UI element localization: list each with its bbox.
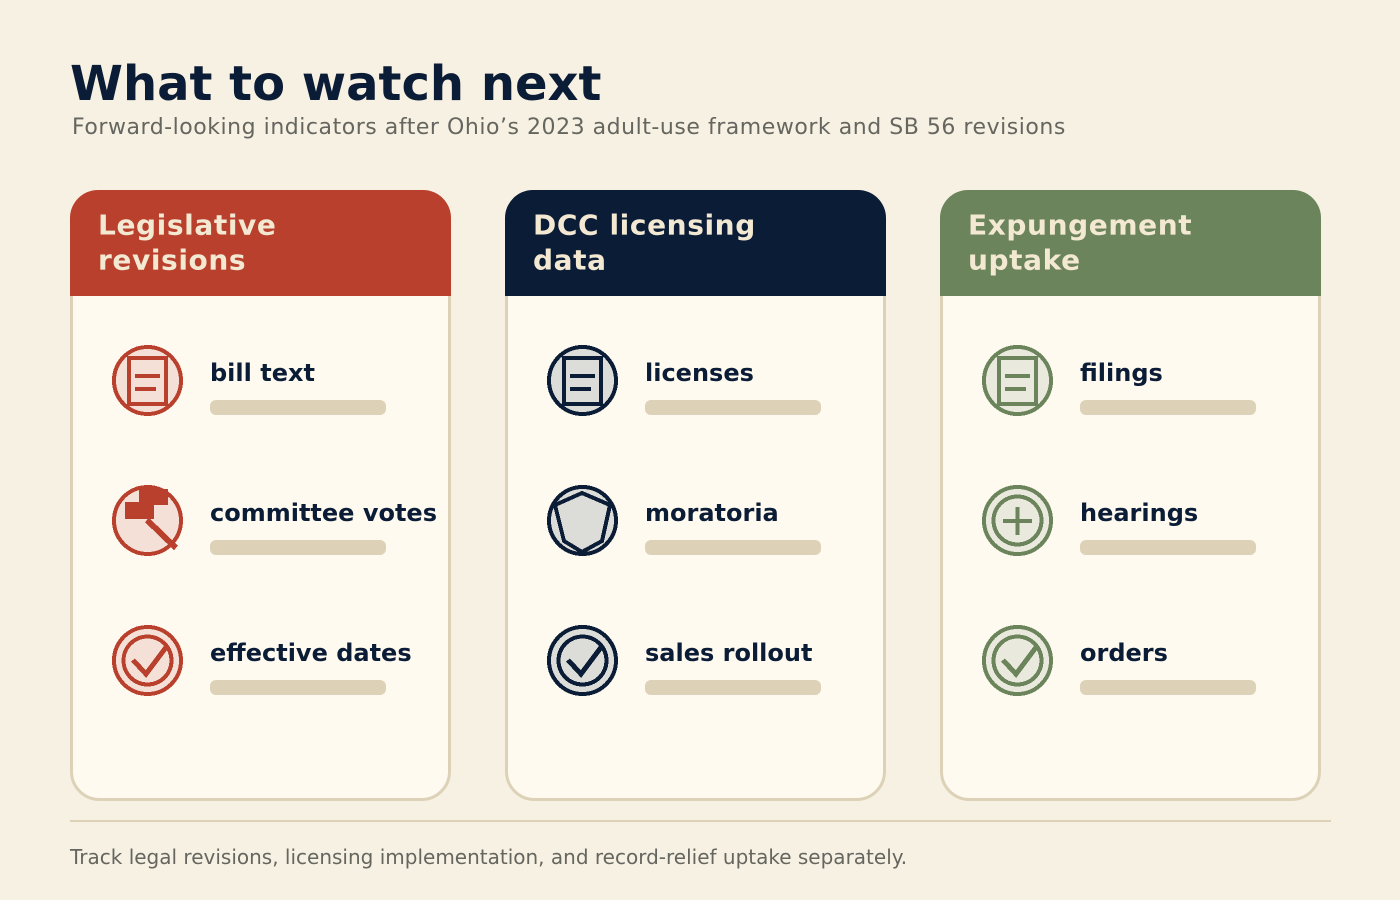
progress bar: hearings [1080,540,1256,555]
title: What to watch next [70,56,601,112]
subtitle: Forward-looking indicators after Ohio’s 2023 adult-use framework and SB 56 revisions [72,115,1066,140]
label: bill text: bill text [210,359,315,387]
label: committee votes: committee votes [210,499,437,527]
icon: plus [984,487,1051,554]
panel header: legislative revisions [70,190,451,296]
heading: expungement uptake: Expungement [968,208,1192,242]
icon: check [984,627,1051,694]
panel header: expungement uptake [940,190,1321,296]
panel: expungement uptake [940,190,1321,800]
footer note: Track legal revisions, licensing implementation, and record-relief uptake separately. [69,845,907,869]
icon: check [549,627,616,694]
progress bar: orders [1080,680,1256,695]
label: hearings: hearings [1080,499,1198,527]
label: licenses: licenses [645,359,754,387]
progress bar: licenses [645,400,821,415]
progress bar: committee votes [210,540,386,555]
heading: DCC licensing data: DCC licensing [533,208,756,242]
progress bar: effective dates [210,680,386,695]
icon: document [984,347,1051,414]
progress bar: bill text [210,400,386,415]
icon: shield [549,487,616,554]
progress bar: moratoria [645,540,821,555]
heading: legislative revisions: revisions [98,244,246,276]
icon: gavel [114,487,181,554]
label: sales rollout: sales rollout [645,639,812,667]
label: effective dates: effective dates [210,639,412,667]
heading: DCC licensing data: data [533,244,607,276]
panel: DCC licensing data [505,190,886,800]
icon: document [549,347,616,414]
panel header: DCC licensing data [505,190,886,296]
icon: document [114,347,181,414]
panel: legislative revisions [70,190,451,800]
label: orders: orders [1080,639,1168,667]
progress bar: sales rollout [645,680,821,695]
icon: check [114,627,181,694]
heading: legislative revisions: Legislative [98,208,276,242]
label: moratoria: moratoria [645,499,779,527]
label: filings: filings [1080,359,1163,387]
progress bar: filings [1080,400,1256,415]
heading: expungement uptake: uptake [968,244,1081,276]
